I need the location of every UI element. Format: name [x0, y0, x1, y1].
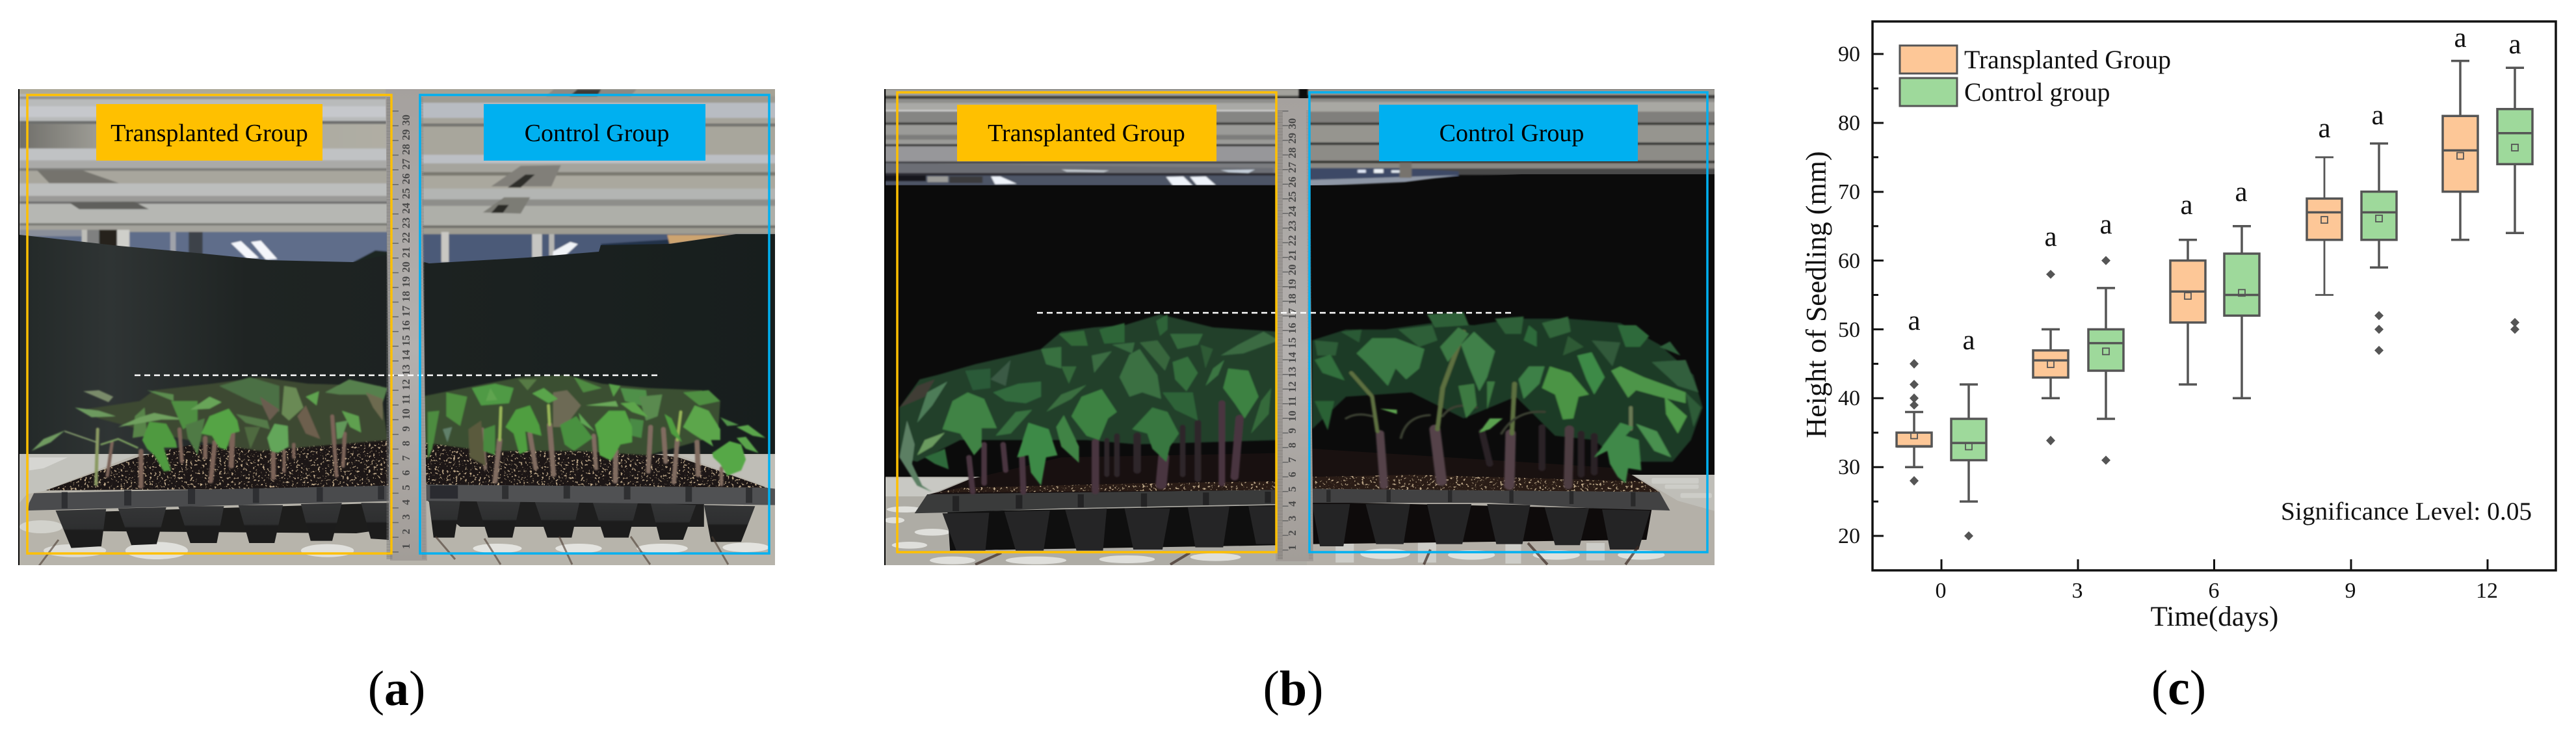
height dashed line b: [1037, 312, 1512, 313]
ruler a: 10: [400, 408, 412, 419]
ruler b: 14: [1286, 352, 1298, 363]
significance letters: [1908, 23, 2521, 356]
ruler a: 26: [400, 173, 412, 185]
ruler b: 8: [1286, 442, 1298, 448]
x axis tick labels: 6: [2208, 579, 2220, 603]
significance letters: a: [2318, 113, 2331, 144]
x axis tick labels: 12: [2476, 579, 2498, 603]
significance note: Significance Level: 0.05: [2281, 497, 2532, 525]
ruler b: 27: [1286, 161, 1298, 173]
seedlings left: [20, 377, 389, 559]
ruler a: 22: [400, 232, 412, 243]
ruler a: 4: [400, 499, 412, 505]
ruler b: 2: [1286, 530, 1298, 536]
ruler a: 30: [400, 114, 412, 126]
height dashed line a: [135, 375, 659, 376]
ruler a: 6: [400, 470, 412, 475]
ruler b: 26: [1286, 177, 1298, 187]
ruler a: 5: [400, 485, 412, 490]
caption b: (b): [1263, 661, 1323, 716]
transplanted group boxes: [1897, 61, 2478, 467]
ruler b: 4: [1286, 501, 1298, 507]
shelving b right: [1308, 89, 1728, 187]
label: transplanted group b: Transplanted Group: [988, 120, 1185, 147]
legend: [1900, 46, 2171, 107]
ruler a: 17: [400, 305, 412, 317]
seedlings right: [421, 375, 776, 553]
ruler b: 10: [1286, 410, 1298, 421]
panel a: photo of seedlings before transplant comparison: [19, 89, 778, 566]
significance letters: a: [1908, 306, 1921, 336]
ruler a: 1: [400, 544, 412, 549]
label: transplanted group a: Transplanted Group: [111, 120, 308, 147]
significance letters: a: [2099, 209, 2112, 240]
black curtain: [20, 234, 775, 454]
bench floor: [20, 454, 775, 565]
ruler b: 9: [1286, 428, 1298, 433]
caption a: (a): [368, 661, 425, 716]
ruler a: 11: [400, 394, 412, 405]
significance letters: a: [2044, 222, 2057, 252]
ruler b: 11: [1286, 396, 1298, 406]
label: transplanted group a: [96, 104, 322, 161]
legend: Transplanted Group: [1964, 46, 2171, 74]
ruler b: 22: [1286, 235, 1298, 246]
ruler b: 6: [1286, 472, 1298, 477]
label: control group a: [484, 104, 705, 161]
ruler a: 19: [400, 276, 412, 287]
x axis title: Time(days): [2151, 602, 2278, 632]
shelving b left: [885, 89, 1299, 185]
ruler a: 24: [400, 202, 412, 214]
y axis tick labels: 30: [1838, 455, 1860, 479]
ruler b: 7: [1286, 457, 1298, 462]
shelving left: [20, 89, 388, 265]
y axis tick labels: 60: [1838, 249, 1860, 273]
plot frame and ticks: [1873, 21, 2556, 570]
ruler b: 1: [1286, 545, 1298, 550]
significance letters: a: [2454, 23, 2467, 53]
ruler a: 3: [400, 514, 412, 520]
ruler b: 24: [1286, 206, 1298, 217]
ruler b: 17: [1286, 308, 1298, 319]
ruler a: 12: [400, 379, 412, 390]
significance letters: a: [2371, 100, 2384, 131]
ruler a: 28: [400, 144, 412, 155]
significance letters: a: [2180, 190, 2193, 220]
transplanted frame b: [897, 92, 1276, 552]
y axis tick labels: 20: [1838, 524, 1860, 548]
ruler b: 5: [1286, 486, 1298, 492]
mean markers: [1911, 144, 2518, 450]
shelving right: [417, 89, 778, 265]
ruler a: 25: [400, 188, 412, 199]
significance letters: a: [2508, 29, 2521, 60]
ruler a: 27: [400, 158, 412, 170]
ruler a: 29: [400, 129, 412, 140]
ruler b: 13: [1286, 367, 1298, 378]
transplanted frame a: [27, 95, 391, 553]
label: control group b: [1379, 105, 1638, 161]
panel b: photo of seedlings later comparison: [884, 89, 1728, 566]
control frame a: [420, 95, 769, 553]
ruler a: [386, 89, 427, 561]
x axis tick labels: 9: [2345, 579, 2356, 603]
ruler a: 14: [400, 349, 412, 361]
ruler b: 21: [1286, 250, 1298, 261]
y axis tick labels: [1838, 42, 1860, 548]
ruler a: 18: [400, 291, 412, 302]
ruler a: 8: [400, 441, 412, 446]
ruler b: [1276, 98, 1313, 561]
ruler a: 2: [400, 529, 412, 535]
ruler b: 18: [1286, 293, 1298, 304]
ruler a: 16: [400, 320, 412, 332]
control frame b: [1309, 92, 1707, 552]
ruler b: 12: [1286, 381, 1298, 392]
ruler b: 28: [1286, 147, 1298, 159]
ruler b: 29: [1286, 133, 1298, 144]
ruler b: 19: [1286, 279, 1298, 290]
x axis tick labels: 3: [2071, 579, 2083, 603]
legend: Control group: [1964, 78, 2110, 107]
ruler b: 20: [1286, 264, 1298, 275]
x axis tick labels: 0: [1935, 579, 1947, 603]
ruler b: 23: [1286, 220, 1298, 232]
seedlings b left: [884, 314, 1279, 566]
ruler a: 21: [400, 247, 412, 258]
seedlings b right: [1307, 312, 1725, 566]
label: control group a: Control Group: [525, 120, 669, 147]
ruler b: 25: [1286, 191, 1298, 202]
significance letters: a: [1962, 325, 1975, 356]
ruler b: 3: [1286, 516, 1298, 521]
significance letters: a: [2235, 177, 2248, 207]
ruler b: 16: [1286, 323, 1298, 334]
y axis tick labels: 40: [1838, 386, 1860, 410]
ruler a: 23: [400, 217, 412, 228]
label: control group b: Control Group: [1439, 120, 1584, 147]
ruler a: 9: [400, 426, 412, 431]
left pot floor tone: [39, 537, 728, 566]
y axis title: Height of Seedling (mm): [1800, 151, 1832, 438]
label: transplanted group b: [957, 105, 1216, 161]
ruler b: 30: [1286, 118, 1298, 129]
ruler a: 20: [400, 261, 412, 272]
outliers: [1910, 256, 2519, 540]
control group boxes: [1951, 68, 2532, 501]
ruler b: 15: [1286, 338, 1298, 349]
panel c: box plot of seedling height: [1800, 21, 2556, 632]
y axis tick labels: 70: [1838, 180, 1860, 204]
black backdrop panel b: [886, 174, 1715, 187]
y axis tick labels: 90: [1838, 42, 1860, 66]
y axis tick labels: 80: [1838, 111, 1860, 135]
x axis tick labels: [1935, 579, 2498, 603]
ruler a: 7: [400, 455, 412, 461]
y axis tick labels: 50: [1838, 318, 1860, 342]
caption c: (c): [2151, 661, 2206, 715]
ruler a: 13: [400, 364, 412, 375]
ruler a: 15: [400, 335, 412, 346]
